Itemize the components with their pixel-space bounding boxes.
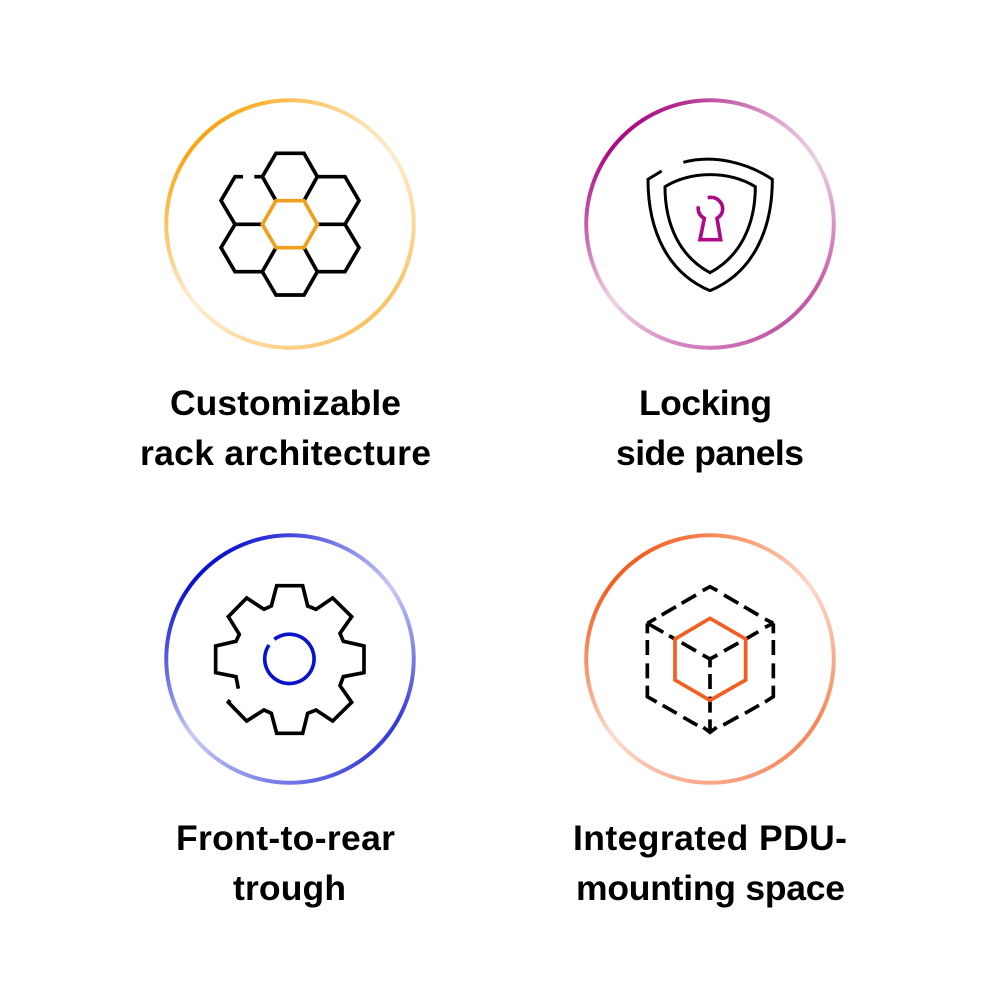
- label: customizable rack architecture: Customizable: [170, 383, 401, 423]
- ring: orange-red: [584, 533, 836, 785]
- label: front-to-rear trough: trough: [233, 868, 346, 908]
- blue hub: [265, 634, 314, 684]
- label: integrated PDU-mounting space: Integrated PDU-: [573, 818, 847, 858]
- label: front-to-rear trough: [176, 818, 395, 908]
- icon: cube in dashed cube: [647, 587, 773, 732]
- ring: magenta: [584, 98, 836, 350]
- orange inner cube: [675, 618, 746, 700]
- ring: blue: [164, 533, 416, 785]
- label: locking side panels: side panels: [616, 433, 804, 473]
- orange centre hexagon: [262, 201, 317, 248]
- label: customizable rack architecture: rack architecture: [140, 433, 431, 473]
- ring: orange: [164, 98, 416, 350]
- magenta keyhole: [698, 197, 723, 240]
- label: locking side panels: [616, 383, 804, 473]
- label: integrated PDU-mounting space: mounting space: [576, 868, 845, 908]
- icon: shield with keyhole: [648, 159, 772, 291]
- label: customizable rack architecture: [140, 383, 431, 473]
- label: front-to-rear trough: Front-to-rear: [176, 818, 395, 858]
- icon: honeycomb: [221, 153, 359, 295]
- label: integrated PDU-mounting space: [573, 818, 847, 908]
- label: locking side panels: Locking: [639, 383, 772, 423]
- icon: gear: [216, 586, 364, 733]
